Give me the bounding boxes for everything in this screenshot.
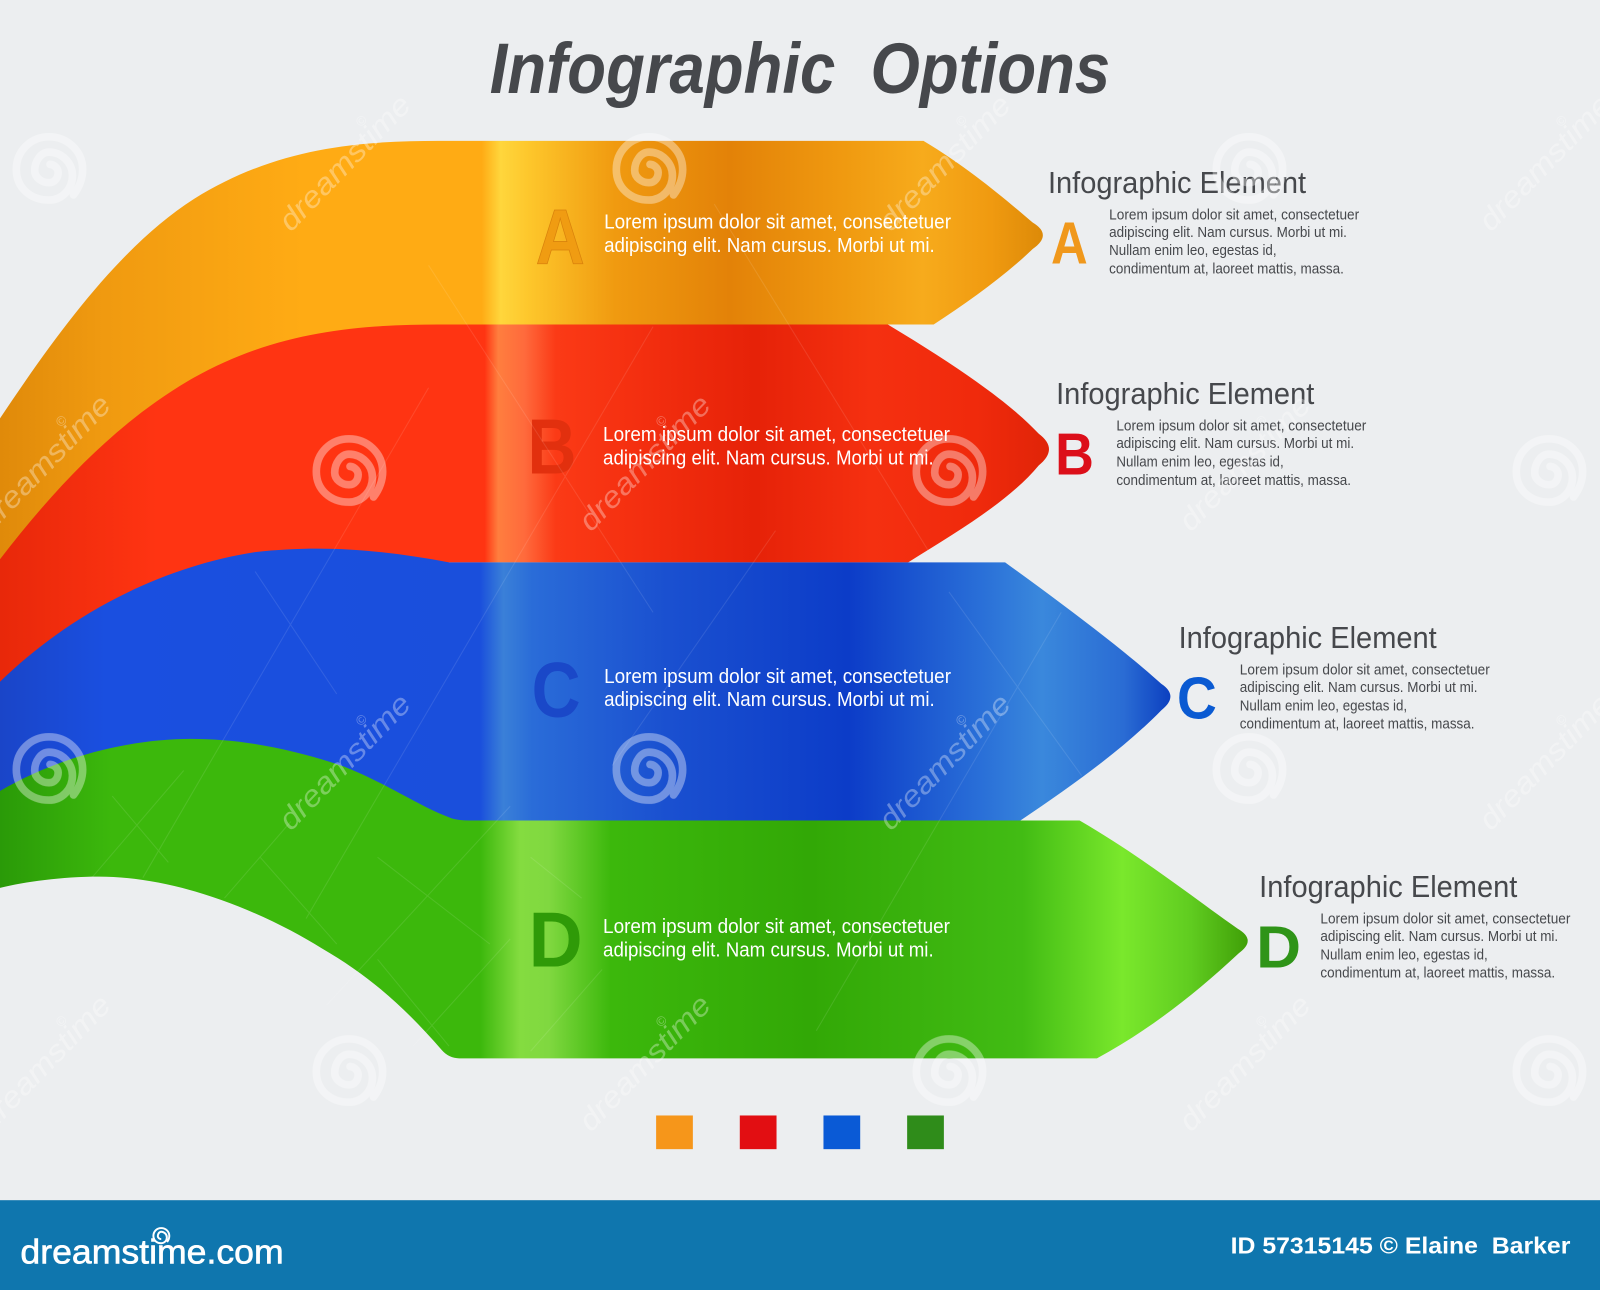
footer image ID and credit: ID 57315145 © Elaine Barker [1231, 1232, 1570, 1258]
panel: arrow A [0, 141, 1043, 572]
title: Infographic Options [490, 29, 1110, 109]
icon: footer logo spiral [153, 1228, 169, 1243]
arrow B shape [0, 325, 1049, 694]
side letter A: A [1051, 209, 1088, 276]
arrow D text: Lorem ipsum dolor sit amet, consectetuer [603, 916, 950, 938]
watermark overlay: dreamstime [1172, 388, 1318, 538]
watermark overlay: © [953, 112, 970, 130]
watermark overlay: dreamstime [1472, 88, 1600, 238]
watermark overlay: © [1553, 112, 1570, 130]
element D description [1256, 870, 1570, 982]
arrow B text: adipiscing elit. Nam cursus. Morbi ut mi. [603, 447, 934, 469]
body D: Lorem ipsum dolor sit amet, consectetuer [1320, 912, 1570, 928]
footer banner [0, 1200, 1600, 1290]
heading B: Infographic Element [1056, 377, 1315, 411]
body C: adipiscing elit. Nam cursus. Morbi ut mi. [1240, 680, 1478, 696]
body B: adipiscing elit. Nam cursus. Morbi ut mi. [1116, 436, 1354, 452]
watermark overlay: dreamstime [1472, 687, 1600, 837]
element C description [1177, 621, 1490, 733]
body C: condimentum at, laoreet mattis, massa. [1240, 717, 1474, 733]
arrow C text: Lorem ipsum dolor sit amet, consectetuer [604, 666, 951, 688]
watermark overlay: dreamstime [872, 687, 1018, 837]
body A: condimentum at, laoreet mattis, massa. [1109, 262, 1344, 278]
watermark overlay: © [1253, 412, 1270, 430]
heading A: Infographic Element [1048, 166, 1307, 200]
watermark overlay: dreamstime [272, 88, 418, 238]
letter B inside arrow: B [528, 405, 577, 491]
panel: arrow C [0, 549, 1170, 821]
arrow A text: Lorem ipsum dolor sit amet, consectetuer [604, 212, 951, 234]
watermark overlay: dreamstime [272, 687, 418, 837]
heading D: Infographic Element [1259, 870, 1518, 904]
letter D inside arrow: D [529, 897, 583, 983]
arrow B text: Lorem ipsum dolor sit amet, consectetuer [603, 424, 950, 446]
watermark overlay: dreamstime [1172, 988, 1318, 1138]
element A description [1048, 166, 1359, 278]
heading C: Infographic Element [1179, 621, 1437, 655]
arrow D shape [0, 739, 1248, 1058]
side letter B: B [1055, 421, 1094, 488]
side letter D: D [1256, 913, 1301, 981]
body A: Nullam enim leo, egestas id, [1109, 243, 1277, 259]
arrow C shape [0, 549, 1170, 821]
colour legend squares [656, 1115, 944, 1149]
letter A inside arrow: A [536, 194, 585, 280]
watermark overlay: © [953, 711, 970, 729]
panel: arrow B [0, 325, 1049, 694]
watermark overlay: © [653, 1012, 670, 1030]
watermark overlay: © [653, 412, 670, 430]
watermark overlay: dreamstime [572, 988, 718, 1138]
watermark overlay: © [353, 112, 370, 130]
arrow A shape [0, 141, 1043, 572]
element B description [1055, 377, 1366, 489]
watermark overlay: © [53, 412, 70, 430]
body D: condimentum at, laoreet mattis, massa. [1320, 966, 1555, 982]
body A: adipiscing elit. Nam cursus. Morbi ut mi. [1109, 225, 1347, 241]
body C: Nullam enim leo, egestas id, [1240, 698, 1407, 714]
watermark overlay: © [1253, 1012, 1270, 1030]
watermark overlay: © [1553, 711, 1570, 729]
panel: arrow D [0, 739, 1248, 1058]
watermark overlay: dreamstime [572, 388, 718, 538]
watermark overlay: © [53, 1012, 70, 1030]
footer logo text: dreamstime.com [20, 1233, 284, 1271]
arrow D text: adipiscing elit. Nam cursus. Morbi ut mi. [603, 939, 934, 961]
arrow A text: adipiscing elit. Nam cursus. Morbi ut mi. [604, 235, 935, 257]
body B: condimentum at, laoreet mattis, massa. [1116, 473, 1351, 489]
body A: Lorem ipsum dolor sit amet, consectetuer [1109, 207, 1359, 223]
watermark overlay: dreamstime [872, 88, 1018, 238]
body B: Nullam enim leo, egestas id, [1116, 454, 1284, 470]
body C: Lorem ipsum dolor sit amet, consectetuer [1240, 663, 1490, 679]
watermark overlay: © [353, 711, 370, 729]
body D: adipiscing elit. Nam cursus. Morbi ut mi. [1320, 929, 1558, 945]
body D: Nullam enim leo, egestas id, [1320, 947, 1488, 963]
letter C inside arrow: C [532, 647, 581, 733]
side letter C: C [1177, 664, 1217, 731]
arrow C text: adipiscing elit. Nam cursus. Morbi ut mi. [604, 689, 935, 711]
body B: Lorem ipsum dolor sit amet, consectetuer [1116, 419, 1366, 435]
